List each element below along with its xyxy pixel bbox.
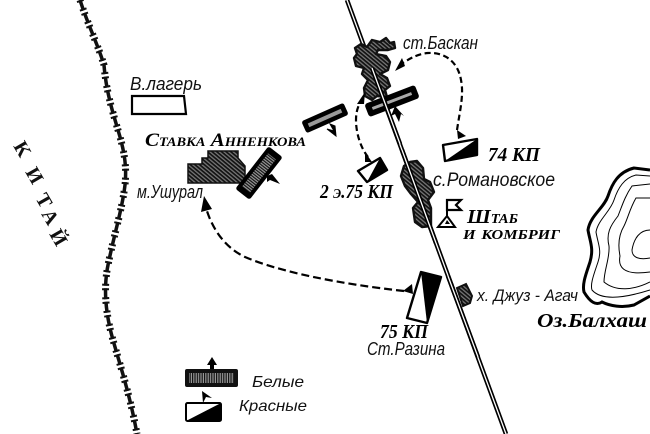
label: Baskan station: ст.Баскан xyxy=(403,33,478,53)
label: Dzhuz-Agach: х. Джуз - Агач xyxy=(476,286,578,305)
dashed arrow: 2 squadron 75 regiment xyxy=(356,92,368,157)
label: China: Й xyxy=(45,225,73,250)
white unit: forward bar xyxy=(301,103,349,136)
legend: white forces label: Белые xyxy=(252,374,304,391)
old camp rectangle xyxy=(132,96,186,114)
Annenkov headquarters building xyxy=(188,151,245,183)
label: lake Balkhash: Оз.Балхаш xyxy=(537,310,647,332)
label: brigade commander: и комбриг xyxy=(462,222,561,244)
legend: white forces symbol xyxy=(185,357,238,387)
railway over town xyxy=(402,150,436,243)
town: Dzhuz-Agach xyxy=(457,284,472,306)
town: Romanovskoye xyxy=(401,161,434,227)
legend: red forces label: Красные xyxy=(239,398,307,415)
label: Annenkov headquarters: Ставка Анненкова xyxy=(145,130,306,151)
label: China: А xyxy=(37,206,63,229)
label: China: Т xyxy=(31,190,57,213)
legend: red forces symbol xyxy=(186,391,221,421)
lake Balkhash xyxy=(583,168,650,306)
label: China xyxy=(9,138,73,250)
label: Ushural: м.Ушурал xyxy=(137,182,203,202)
label: Romanovskoye: с.Романовское xyxy=(433,170,555,191)
label: China: К xyxy=(9,138,35,161)
dashed arrow: 75 regiment to Ushural xyxy=(201,196,404,291)
red unit: 75 Razin regiment xyxy=(403,272,441,323)
border line xyxy=(80,0,137,434)
red unit: 74 regiment xyxy=(443,130,477,161)
label: 75 regiment: 75 КП xyxy=(380,321,429,343)
railway xyxy=(347,0,506,434)
icon: headquarters flag xyxy=(438,199,461,227)
arrow: white unit advance along railway xyxy=(391,106,404,122)
red unit: 2 squadron 75 regiment xyxy=(358,152,387,182)
label: headquarters: Штаб xyxy=(466,206,518,228)
white unit: bar at Baskan xyxy=(364,85,420,117)
label: China: И xyxy=(21,164,48,188)
white unit: Annenkov bar xyxy=(235,146,283,200)
label: 74 regiment: 74 КП xyxy=(488,144,541,166)
railway over Dzhuz-Agach xyxy=(448,276,478,357)
town: Baskan station xyxy=(354,38,395,100)
label: Razin: Ст.Разина xyxy=(367,339,445,359)
label: old camp: В.лагерь xyxy=(130,74,202,94)
railway over unit xyxy=(372,68,400,144)
label: 2 squadron 75 regiment: 2 э.75 КП xyxy=(319,181,394,203)
dashed arrow: 74 regiment to Baskan xyxy=(395,53,462,130)
